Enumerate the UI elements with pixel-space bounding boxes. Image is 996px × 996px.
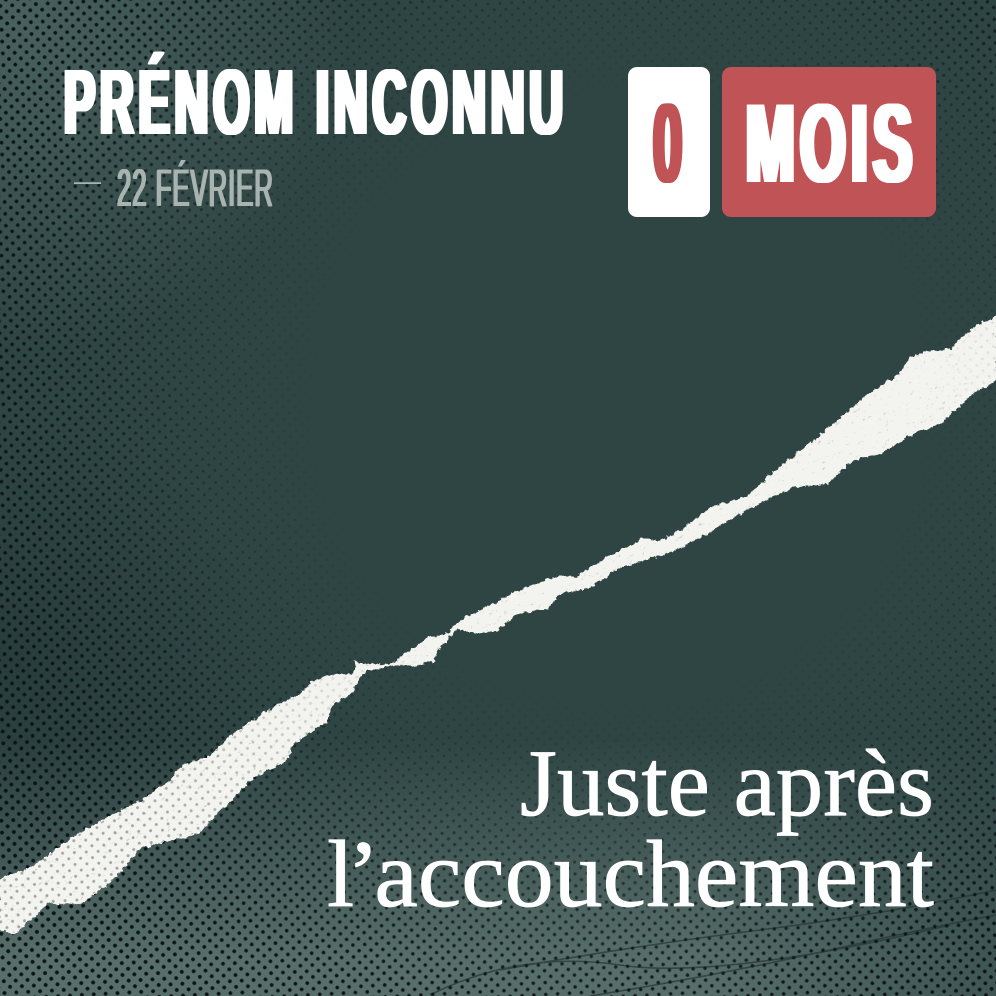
age badge: unit xyxy=(722,67,936,217)
date dash: — xyxy=(74,166,101,196)
torn paper strip xyxy=(0,316,996,934)
date: 22 FÉVRIER xyxy=(117,159,274,218)
title: name: PRÉNOM INCONNU xyxy=(64,50,568,154)
caption line 1: Juste après xyxy=(520,730,934,836)
age badge: number: 0 xyxy=(653,81,682,206)
age badge: unit: MOIS xyxy=(746,81,918,206)
age badge: number xyxy=(628,67,710,217)
caption line 2: l’accouchement xyxy=(327,821,934,927)
